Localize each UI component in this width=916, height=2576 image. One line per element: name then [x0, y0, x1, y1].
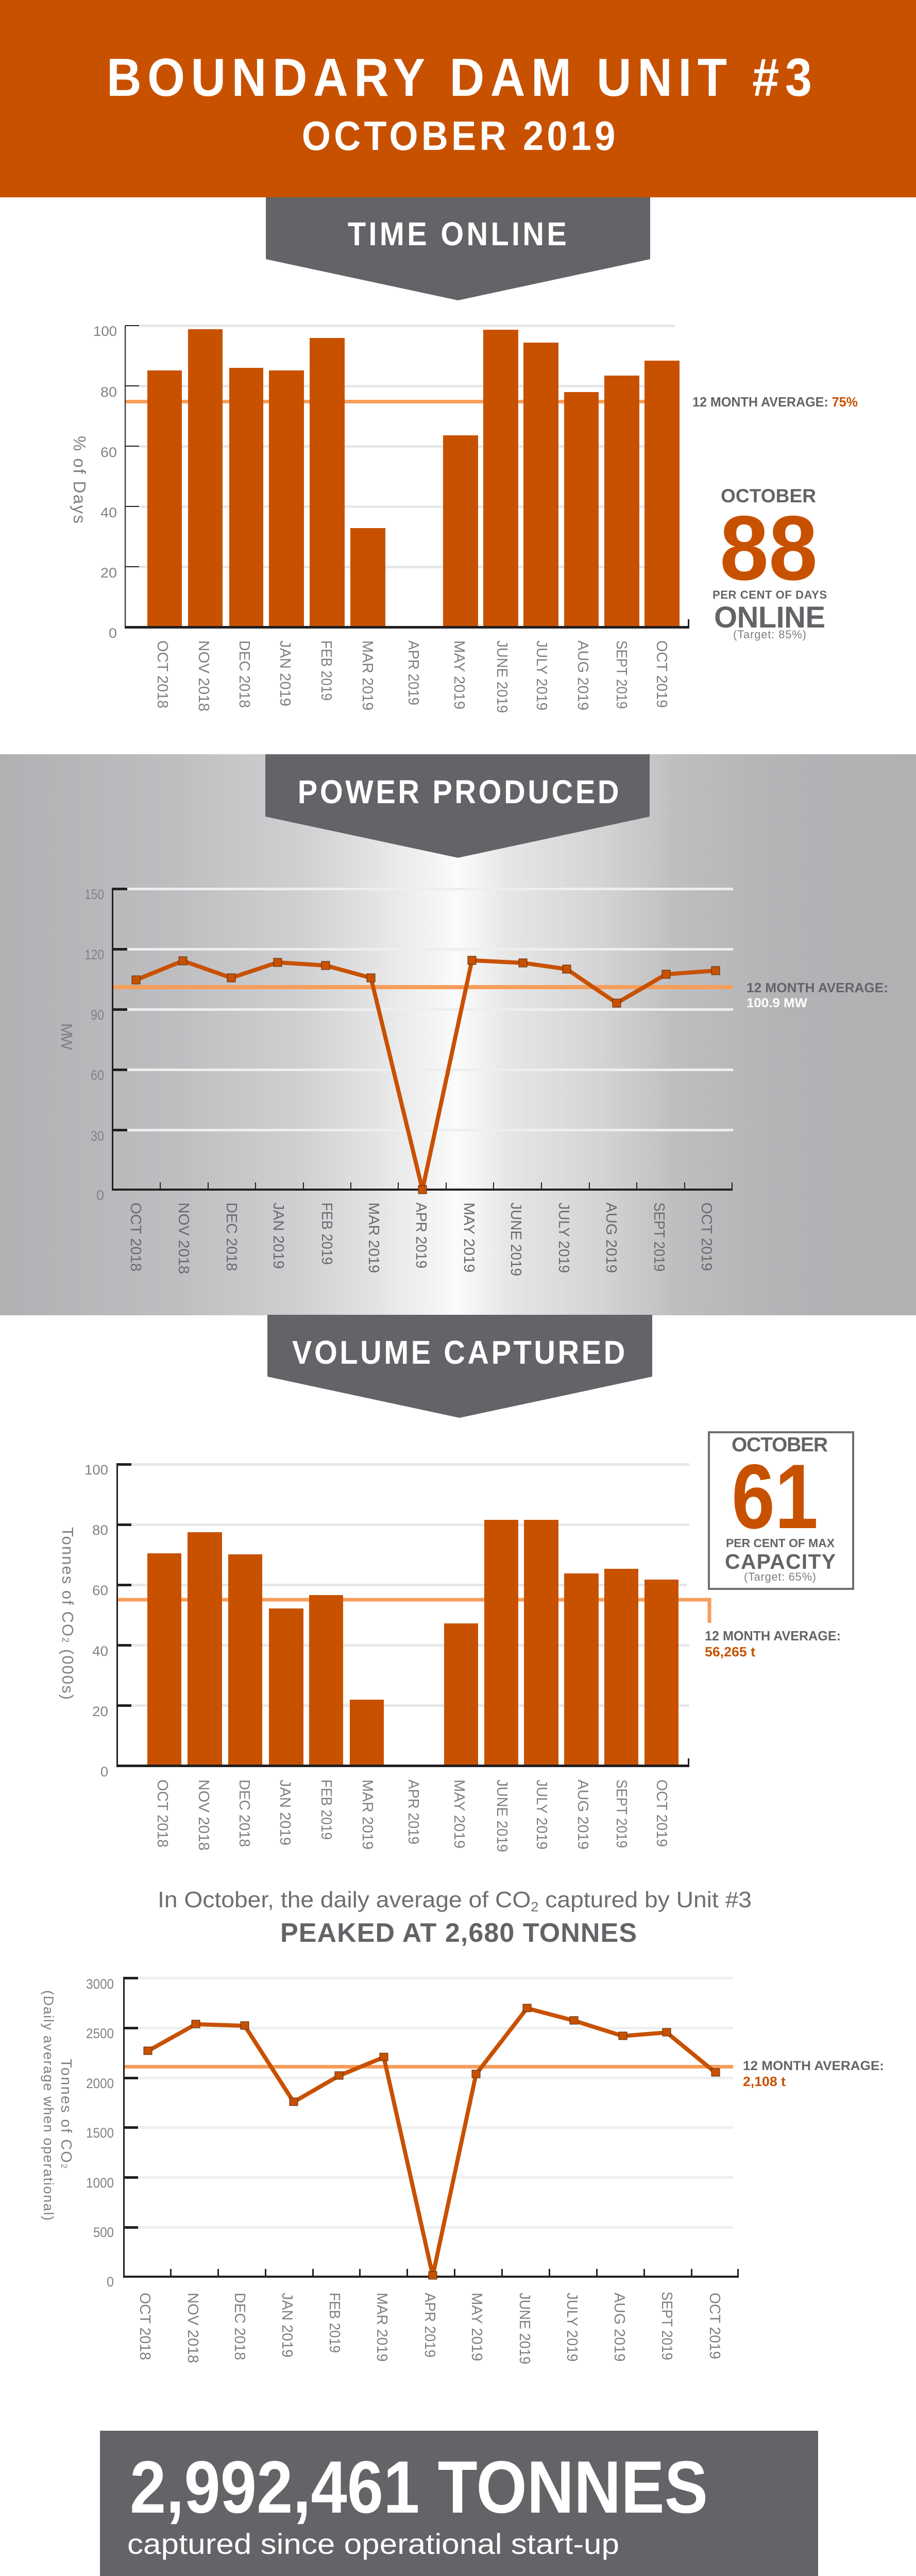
- callout: october 88 per cent online: PER CENT OF DAYS: [713, 588, 827, 601]
- month labels: SEPT 2019: [651, 1202, 667, 1272]
- month labels: JULY 2019: [555, 1202, 572, 1273]
- y axis numbers: [84, 887, 104, 1203]
- panel: power produced background: [0, 754, 916, 1315]
- y axis numbers: 1500: [86, 2125, 114, 2141]
- average label: [705, 1628, 841, 1659]
- title: BOUNDARY DAM UNIT #3: [107, 47, 812, 107]
- month labels: AUG 2019: [603, 1202, 619, 1273]
- data markers: [144, 2004, 720, 2279]
- y axis numbers: 100: [84, 1462, 108, 1478]
- month labels: SEPT 2019: [658, 2292, 675, 2360]
- month labels: SEPT 2019: [613, 640, 630, 709]
- callout: october 88 per cent online: [713, 485, 827, 641]
- month labels: DEC 2018: [223, 1202, 240, 1271]
- y axis numbers: 90: [91, 1007, 104, 1023]
- banner: power produced: [265, 754, 650, 858]
- data line: [148, 2008, 716, 2276]
- average line with connector: [117, 1600, 709, 1623]
- month labels: [154, 640, 670, 713]
- month labels: OCT 2018: [127, 1202, 144, 1272]
- y axis numbers: 2000: [86, 2076, 114, 2091]
- month labels: OCT 2019: [698, 1202, 715, 1271]
- month labels: NOV 2018: [195, 1780, 212, 1851]
- month labels: MAR 2019: [374, 2293, 390, 2362]
- month labels: APR 2019: [421, 2293, 438, 2358]
- average label: 100.9 MW: [747, 996, 807, 1010]
- month labels: JULY 2019: [564, 2293, 580, 2362]
- month labels: MAY 2019: [461, 1202, 477, 1273]
- data line: [136, 960, 716, 1190]
- y axis title: Tonnes of CO 2: [58, 2059, 74, 2168]
- month labels: JUNE 2019: [516, 2293, 533, 2364]
- bar chart: time online: [70, 324, 858, 713]
- y axis numbers: 40: [92, 1643, 108, 1659]
- average label: 12 MONTH AVERAGE:: [743, 2059, 884, 2073]
- bars: [147, 1520, 678, 1766]
- average label: 12 MONTH AVERAGE: 75%: [692, 394, 858, 410]
- y axis numbers: 60: [92, 1583, 108, 1598]
- text: daily average statement: [158, 1887, 752, 1948]
- month labels: OCT 2019: [653, 640, 670, 708]
- month labels: SEPT 2019: [613, 1780, 630, 1848]
- grid lines: [138, 1977, 733, 2229]
- y axis numbers: 100: [93, 324, 117, 339]
- month labels: APR 2019: [405, 640, 421, 705]
- y axis title: (Daily average when operational): [41, 1990, 56, 2221]
- month labels: JAN 2019: [277, 1780, 293, 1845]
- average label: 12 MONTH AVERAGE:: [747, 980, 888, 995]
- callout: october 88 per cent online: OCTOBER: [721, 485, 816, 506]
- average line: [112, 985, 733, 989]
- callout: october 88 per cent online: 88: [720, 497, 818, 599]
- y axis title: % of Days: [70, 436, 89, 523]
- callout box: october 61 per cent of max capacity: 61: [732, 1445, 818, 1548]
- y axis numbers: 3000: [86, 1976, 114, 1992]
- month labels: JAN 2019: [270, 1202, 286, 1269]
- heading: peaked: PEAKED AT 2,680 TONNES: [280, 1918, 637, 1948]
- month labels: OCT 2018: [154, 1780, 171, 1848]
- y axis numbers: 20: [100, 565, 117, 581]
- y axis numbers: 0: [109, 625, 117, 641]
- y axis numbers: 40: [100, 505, 117, 520]
- caption: captured since operational start-up: [127, 2528, 619, 2560]
- month labels: NOV 2018: [175, 1202, 192, 1274]
- month labels: JUNE 2019: [494, 1780, 510, 1852]
- text: daily average statement: 2: [531, 1899, 538, 1914]
- callout box: october 61 per cent of max capacity: [709, 1432, 853, 1589]
- y axis numbers: 500: [93, 2225, 114, 2240]
- y axis numbers: [86, 1976, 114, 2290]
- y axis numbers: [93, 324, 117, 641]
- month labels: APR 2019: [405, 1780, 421, 1844]
- month labels: MAY 2019: [468, 2293, 485, 2361]
- y axis numbers: 80: [100, 384, 117, 400]
- month labels: JUNE 2019: [494, 640, 510, 713]
- y axis numbers: 20: [92, 1704, 108, 1719]
- month labels: AUG 2019: [611, 2293, 627, 2362]
- banner: power produced: POWER PRODUCED: [298, 773, 619, 810]
- month labels: APR 2019: [413, 1202, 429, 1268]
- axes: [125, 325, 689, 629]
- y axis title: [41, 1990, 74, 2221]
- month labels: JAN 2019: [277, 640, 293, 706]
- month labels: OCT 2018: [137, 2293, 153, 2360]
- average label: 2,108 t: [743, 2074, 786, 2089]
- grid lines: [126, 888, 733, 1131]
- month labels: DEC 2018: [236, 640, 252, 708]
- line chart: daily average captured: [41, 1976, 884, 2364]
- month labels: [127, 1202, 715, 1276]
- average label: [747, 980, 888, 1010]
- y axis numbers: 30: [91, 1128, 104, 1144]
- month labels: AUG 2019: [574, 640, 591, 710]
- text: daily average statement: captured by Unit #3: [538, 1887, 752, 1912]
- month labels: OCT 2019: [653, 1780, 670, 1847]
- y axis numbers: 1000: [86, 2175, 114, 2191]
- callout box: october 61 per cent of max capacity: CAPACITY: [725, 1550, 836, 1573]
- month labels: OCT 2019: [706, 2293, 723, 2359]
- y axis numbers: 60: [100, 445, 117, 460]
- month labels: MAR 2019: [365, 1202, 382, 1273]
- month labels: DEC 2018: [231, 2293, 248, 2360]
- month labels: MAR 2019: [359, 640, 376, 710]
- month labels: JULY 2019: [533, 640, 550, 710]
- month labels: JUNE 2019: [507, 1202, 524, 1276]
- axes: [112, 888, 733, 1191]
- callout box: october 61 per cent of max capacity: OCTOBER: [732, 1434, 828, 1456]
- month labels: FEB 2019: [318, 1780, 334, 1840]
- y axis numbers: 120: [84, 947, 104, 962]
- y axis numbers: 60: [91, 1067, 104, 1083]
- grid lines: [131, 1463, 689, 1707]
- y axis numbers: 0: [107, 2274, 114, 2290]
- month labels: MAY 2019: [451, 1780, 467, 1849]
- axes: [123, 1977, 739, 2278]
- month labels: OCT 2018: [154, 640, 171, 708]
- month labels: NOV 2018: [184, 2293, 201, 2363]
- average label: 56,265 t: [705, 1644, 755, 1659]
- month labels: JULY 2019: [533, 1780, 550, 1850]
- y axis numbers: [84, 1462, 108, 1780]
- banner: time online: TIME ONLINE: [348, 215, 567, 252]
- month labels: [137, 2292, 723, 2364]
- grid lines: [139, 325, 675, 568]
- month labels: DEC 2018: [236, 1780, 252, 1847]
- bars: [147, 329, 680, 627]
- average label: 12 MONTH AVERAGE:: [705, 1628, 841, 1643]
- month labels: FEB 2019: [326, 2293, 343, 2353]
- callout: october 88 per cent online: ONLINE: [714, 601, 825, 634]
- y axis numbers: 80: [92, 1522, 108, 1538]
- y axis numbers: 2500: [86, 2026, 114, 2041]
- text: daily average statement: In October, the daily average of CO: [158, 1887, 513, 1912]
- callout box: october 61 per cent of max capacity: (Target: 65%): [744, 1570, 816, 1583]
- month labels: MAR 2019: [359, 1780, 376, 1850]
- subtitle: OCTOBER 2019: [302, 113, 615, 159]
- panel: total tonnes captured: [100, 2431, 818, 2576]
- month labels: AUG 2019: [574, 1780, 591, 1850]
- y axis numbers: 0: [96, 1188, 104, 1203]
- average label: [743, 2059, 884, 2089]
- banner: time online: [266, 197, 650, 300]
- month labels: NOV 2018: [195, 640, 212, 711]
- big number: 2,992,461 TONNES: [130, 2446, 708, 2529]
- bar chart: volume captured: [59, 1462, 841, 1852]
- average line: [125, 400, 646, 403]
- data markers: [132, 956, 720, 1194]
- month labels: FEB 2019: [318, 640, 334, 701]
- average line: [124, 2065, 733, 2069]
- axes: [116, 1463, 689, 1767]
- month labels: JAN 2019: [279, 2293, 295, 2358]
- y axis title: MW: [58, 1023, 76, 1050]
- month labels: [154, 1780, 670, 1852]
- line chart: power produced: [58, 887, 888, 1276]
- header band: [0, 0, 916, 197]
- callout box: october 61 per cent of max capacity: PER CENT OF MAX: [726, 1536, 835, 1550]
- banner: volume captured: [267, 1315, 652, 1418]
- month labels: MAY 2019: [451, 640, 467, 709]
- y axis numbers: 150: [84, 887, 104, 902]
- y axis title: Tonnes of CO 2 (000s): [59, 1527, 77, 1700]
- banner: volume captured: VOLUME CAPTURED: [292, 1334, 625, 1371]
- y axis numbers: 0: [100, 1764, 108, 1780]
- callout: october 88 per cent online: (Target: 85%): [733, 628, 806, 641]
- month labels: FEB 2019: [318, 1202, 335, 1265]
